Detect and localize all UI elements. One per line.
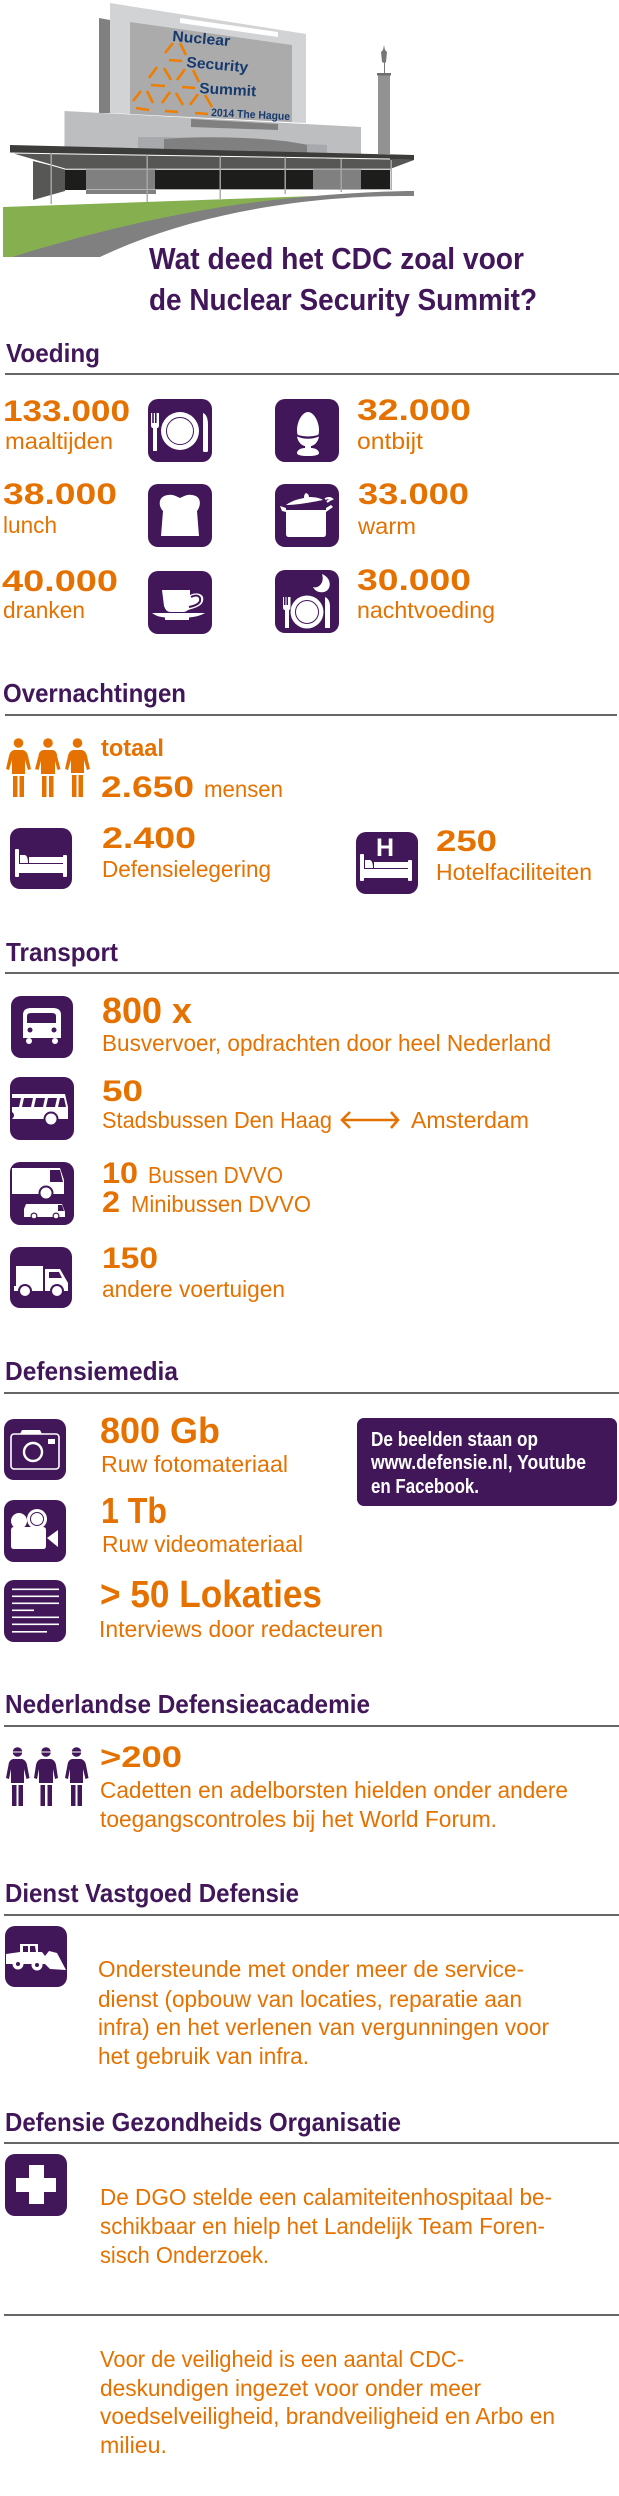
stat: 50 Stadsbussen: 50 (102, 1075, 143, 1108)
callout: De beelden: www.defensie.nl, Youtube (370, 1452, 586, 1474)
icon: medical cross (5, 2154, 67, 2216)
stat: 10 Bussen, 2 Minibussen DVVO: 10 (102, 1157, 138, 1190)
stat: 2.400 Defensielegering: Defensielegering (102, 856, 271, 882)
text: Voor de veiligheid: deskundigen ingezet voor onder meer (100, 2375, 481, 2401)
panel: Defensie Gezondheids Organisatie (4, 2107, 619, 2268)
stat: 800 Gb: 800 Gb (100, 1410, 220, 1451)
title: Wat deed het CDC zoal voor (149, 241, 524, 276)
text: Ondersteunde (98, 1956, 549, 2069)
text: De DGO: sisch Onderzoek. (100, 2242, 269, 2268)
title (149, 241, 537, 317)
stat: 800 x (102, 990, 551, 1056)
panel: Transport (5, 937, 619, 1308)
stat: 250 Hotelfaciliteiten: Hotelfaciliteiten (436, 859, 592, 885)
icon: cooking pot (275, 484, 339, 547)
stat: 133.000 maaltijden (3, 395, 130, 454)
text: Cadetten: toegangscontroles bij het World Forum. (100, 1806, 497, 1832)
text: Ondersteunde: dienst (opbouw van locaties, reparatie aan (98, 1986, 522, 2012)
icon: three people (6, 738, 90, 797)
stat: 40.000 dranken: dranken (3, 597, 85, 623)
icon: truck (10, 1247, 72, 1308)
heading: Defensie Gezondheids Organisatie: Defensie Gezondheids Organisatie (5, 2107, 401, 2137)
stat: 800 x: Busvervoer, opdrachten door heel Nederland (102, 1030, 551, 1056)
icon: text document (4, 1580, 66, 1642)
text: Voor de veiligheid: voedselveiligheid, brandveiligheid en Arbo en (100, 2403, 555, 2429)
stat: 800 x: 800 x (102, 990, 192, 1031)
stat: 32.000 ontbijt (357, 394, 471, 454)
stat: 33.000 warm: warm (357, 513, 416, 539)
stat: 150 andere voertuigen: andere voertuigen (102, 1276, 285, 1302)
icon: three cadets (6, 1747, 88, 1806)
stat: 33.000 warm (357, 478, 469, 539)
icon: hotel bed: H (376, 834, 394, 862)
icon: egg in cup (275, 399, 339, 462)
stat: 133.000 maaltijden: 133.000 (3, 395, 130, 428)
stat: 32.000 ontbijt: ontbijt (357, 428, 424, 454)
stat: 150 andere voertuigen (102, 1242, 285, 1302)
stat: 250 Hotelfaciliteiten: 250 (436, 825, 497, 858)
icon: plate with cutlery (148, 399, 212, 462)
stat: 2.400 Defensielegering: 2.400 (102, 822, 196, 855)
stat: totaal 2.650 mensen: 2.650 (101, 771, 194, 804)
text: Cadetten: Cadetten en adelborsten hielden onder andere (100, 1777, 568, 1803)
text: Voor de veiligheid (100, 2346, 555, 2458)
heading: Nederlandse Defensieacademie: Nederlandse Defensieacademie (5, 1689, 370, 1719)
stat: 38.000 lunch: 38.000 (3, 478, 117, 511)
icon: slice of bread (148, 484, 212, 547)
stat: 250 Hotelfaciliteiten (436, 825, 592, 885)
summit logo: 2014 The Hague (211, 107, 290, 123)
icon: camera (4, 1419, 66, 1480)
stat: totaal 2.650 mensen: mensen (204, 776, 283, 802)
stat: 30.000 nachtvoeding: nachtvoeding (357, 597, 495, 623)
stat: 1 Tb: 1 Tb (101, 1490, 167, 1531)
stat: 30.000 nachtvoeding: 30.000 (357, 564, 471, 597)
panel: Dienst Vastgoed Defensie (4, 1878, 619, 2069)
stat: 800 Gb: Ruw fotomateriaal (101, 1451, 288, 1477)
icon: night meal (275, 570, 339, 633)
callout: De beelden: en Facebook. (371, 1476, 479, 1498)
text: Voor de veiligheid: milieu. (100, 2432, 167, 2458)
text: De DGO (100, 2184, 552, 2268)
heading: Defensiemedia: Defensiemedia (5, 1356, 179, 1386)
icon: wheel loader (5, 1926, 67, 1987)
panel: Voeding (2, 338, 619, 634)
text: Ondersteunde: het gebruik van infra. (98, 2043, 309, 2069)
arrow: Den Haag to Amsterdam (342, 1112, 398, 1128)
panel: Defensiemedia (4, 1356, 619, 1642)
stat: 150 andere voertuigen: 150 (102, 1242, 158, 1275)
icon: city bus (10, 1077, 74, 1140)
summit logo: Security (186, 54, 250, 76)
stat: >200: >200 (100, 1741, 182, 1774)
summit logo: Summit (199, 80, 257, 100)
heading: Dienst Vastgoed Defensie: Dienst Vastgoed Defensie (5, 1878, 299, 1908)
summit logo: Nuclear (172, 28, 231, 50)
icon: video camera (4, 1500, 66, 1562)
stat: 38.000 lunch (3, 478, 117, 538)
stat: 40.000 dranken (2, 565, 118, 623)
stat: 50 Stadsbussen: Stadsbussen Den Haag (102, 1107, 332, 1133)
stat: 133.000 maaltijden: maaltijden (5, 428, 113, 454)
stat: totaal 2.650 mensen (101, 735, 283, 804)
stat: totaal 2.650 mensen: totaal (101, 735, 164, 762)
callout: De beelden (357, 1418, 617, 1506)
stat: 1 Tb: Ruw videomateriaal (102, 1531, 303, 1557)
text: Ondersteunde: Ondersteunde met onder meer de service- (98, 1956, 524, 1982)
stat: 800 Gb (100, 1410, 288, 1477)
heading: Overnachtingen: Overnachtingen (3, 678, 186, 708)
stat: 30.000 nachtvoeding (357, 564, 495, 623)
stat: 10 Bussen, 2 Minibussen DVVO: 2 (102, 1186, 120, 1219)
text: Cadetten (100, 1777, 568, 1832)
stat: 38.000 lunch: lunch (3, 512, 57, 538)
stat: 10 Bussen, 2 Minibussen DVVO: Minibussen DVVO (131, 1191, 311, 1217)
stat: 33.000 warm: 33.000 (358, 478, 469, 511)
panel: Nederlandse Defensieacademie (4, 1689, 619, 1832)
heading: Voeding: Voeding (6, 338, 100, 368)
icon: bus and minibus (10, 1162, 74, 1225)
stat: 50 Stadsbussen: Amsterdam (411, 1107, 529, 1133)
text: Voor de veiligheid: Voor de veiligheid is een aantal CDC- (100, 2346, 464, 2372)
illustration: World Forum building (3, 3, 414, 257)
icon: hotel bed (356, 832, 418, 894)
stat: 2.400 Defensielegering (102, 822, 271, 882)
heading: Transport: Transport (6, 937, 118, 967)
icon: cup and saucer (148, 571, 212, 634)
stat: 1 Tb (101, 1490, 303, 1557)
text: De DGO: schikbaar en hielp het Landelijk Team Foren- (100, 2213, 545, 2239)
callout: De beelden: De beelden staan op (371, 1429, 538, 1451)
stat: 10 Bussen, 2 Minibussen DVVO: Bussen DVVO (148, 1162, 283, 1188)
icon: bed (10, 828, 72, 889)
stat: 50 Stadsbussen (102, 1075, 529, 1133)
summit logo (133, 28, 290, 123)
stat: > 50 Lokaties: > 50 Lokaties (100, 1574, 322, 1616)
stat: > 50 Lokaties (99, 1574, 383, 1642)
stat: 10 Bussen, 2 Minibussen DVVO (102, 1157, 311, 1219)
text: De DGO: De DGO stelde een calamiteitenhospitaal be- (100, 2184, 552, 2210)
stat: 32.000 ontbijt: 32.000 (357, 394, 471, 427)
title: de Nuclear Security Summit? (149, 282, 537, 317)
icon: bus front (11, 996, 73, 1058)
panel: Overnachtingen (3, 678, 617, 894)
text: Ondersteunde: infra) en het verlenen van vergunningen voor (98, 2014, 549, 2040)
stat: > 50 Lokaties: Interviews door redacteuren (99, 1616, 383, 1642)
stat: 40.000 dranken: 40.000 (2, 565, 118, 598)
tower (377, 45, 391, 154)
